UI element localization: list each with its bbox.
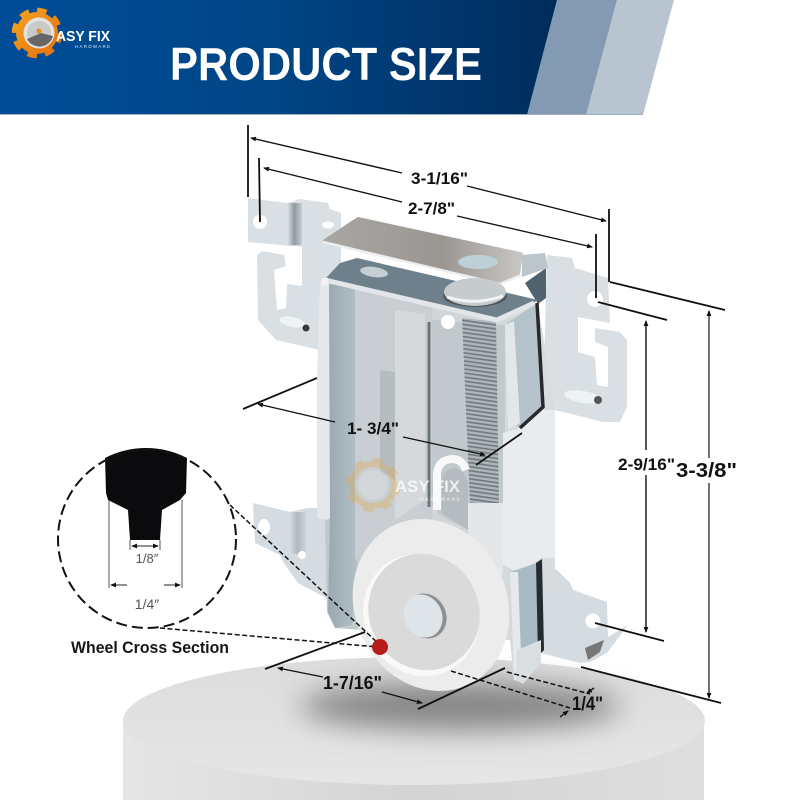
right light panel — [503, 410, 555, 570]
dimension: 1-3/4: 1- 3/4" — [347, 419, 399, 438]
dimension: 2-9/16 — [595, 321, 675, 641]
logo — [14, 10, 110, 56]
panel below rod — [468, 503, 503, 575]
dimension: 1-3/4 — [243, 378, 522, 465]
product: sliding door roller — [248, 198, 628, 717]
pedestal — [123, 657, 705, 800]
dimension: 2-7/8: 2-7/8" — [408, 199, 455, 218]
dimension: 3-3/8: 3-3/8" — [676, 460, 737, 482]
callout marker — [372, 639, 388, 655]
dimension: 2-7/8 — [259, 158, 667, 320]
wheel — [325, 493, 537, 717]
lower tray — [322, 258, 538, 320]
dimension: 2-9/16: 2-9/16" — [618, 455, 675, 474]
dimension: 1/4: 1/4" — [572, 694, 603, 715]
lower right strip — [510, 563, 541, 684]
icon: gear — [14, 10, 60, 56]
watermark tagline: HARDWARE — [420, 497, 461, 503]
dimension: 3-1/16 — [248, 125, 725, 310]
bracket: top right — [525, 255, 627, 422]
dimension: 3-1/16: 3-1/16" — [411, 169, 468, 188]
callout dashed lines — [160, 505, 380, 647]
cross-section inset — [58, 448, 236, 628]
header banner — [0, 0, 674, 115]
threaded rod — [462, 318, 499, 503]
label: 1/8: 1/8″ — [136, 551, 159, 566]
bracket: lower left — [253, 503, 330, 600]
bracket: lower right — [541, 565, 628, 663]
inset circle — [58, 450, 236, 628]
slot panel — [432, 320, 505, 530]
title: PRODUCT SIZE — [170, 38, 482, 90]
top plate — [323, 217, 548, 284]
dimension lines — [109, 500, 182, 588]
housing body — [317, 280, 555, 684]
dimension: 1/4 — [451, 671, 603, 717]
logo wordmark: ASY FIX — [56, 28, 110, 45]
label: 1/4: 1/4″ — [135, 596, 159, 612]
logo tagline: HARDWARE — [75, 44, 110, 49]
white slot — [442, 468, 468, 530]
left flange — [317, 280, 331, 520]
wheel profile — [105, 448, 187, 540]
left dark band — [328, 284, 357, 628]
dimension: 1-7/16 — [265, 632, 505, 709]
dimension: 1-7/16: 1-7/16" — [323, 673, 382, 693]
watermark logo — [348, 460, 398, 510]
product shadow — [300, 682, 620, 730]
center plate shading — [355, 290, 432, 560]
bracket: top left — [248, 198, 341, 352]
right box — [507, 303, 543, 428]
watermark text: ASY FIX — [395, 477, 461, 496]
screw head — [443, 278, 507, 307]
heading: wheel cross section: Wheel Cross Section — [71, 638, 229, 657]
dimension: 3-3/8 — [581, 311, 737, 703]
